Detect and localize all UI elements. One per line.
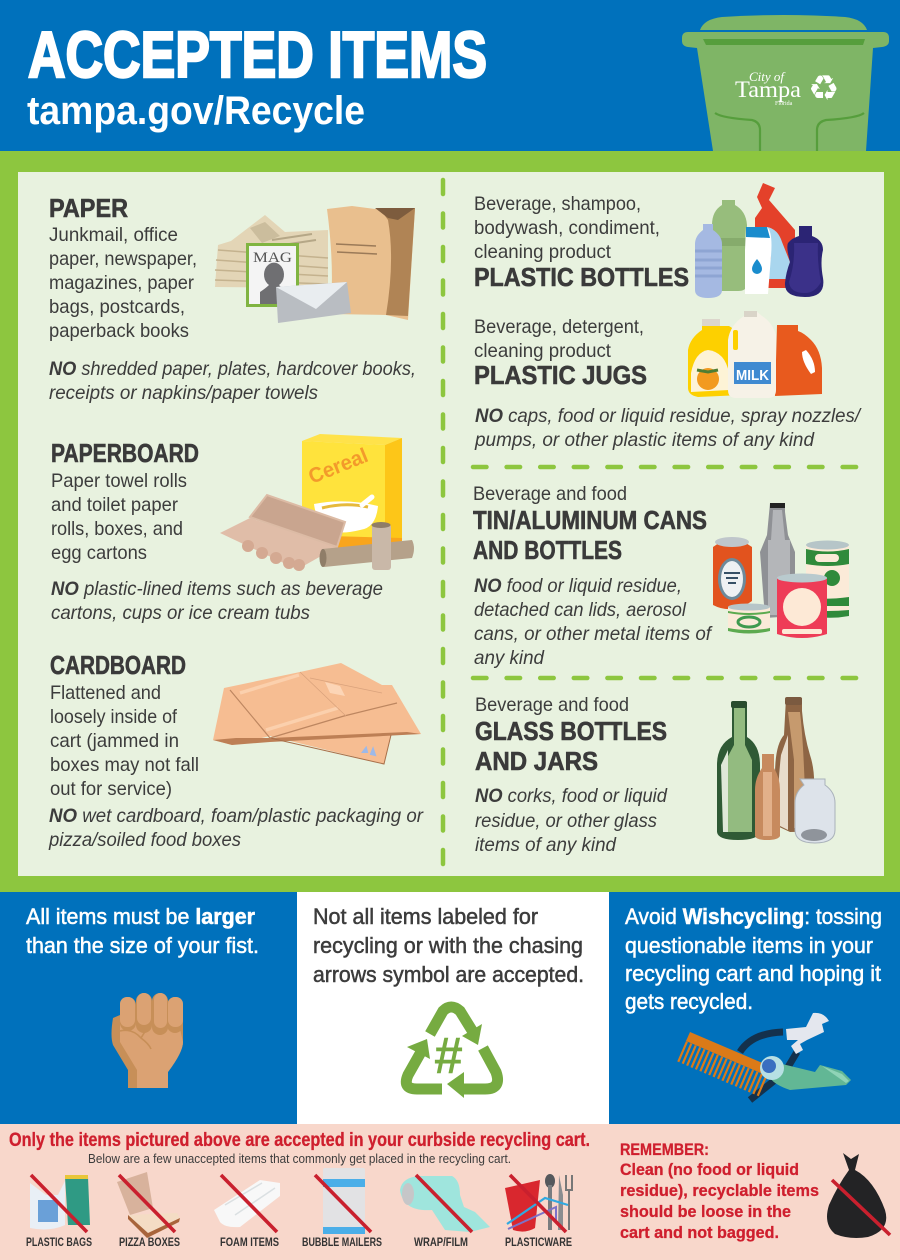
warning heading: Only the items pictured above are accepted in your curbside recycling cart. bbox=[9, 1130, 590, 1151]
icon: recycling cart: City of bbox=[749, 69, 786, 84]
item: plastic bags bbox=[26, 1175, 92, 1249]
icon: recycling cart: Florida bbox=[775, 101, 793, 107]
item: bubble mailers bbox=[302, 1168, 382, 1249]
cardboard section text: CARDBOARD bbox=[50, 650, 186, 680]
icon: recycling symbol with number sign bbox=[406, 1007, 498, 1098]
paperboard section text: cartons, cups or ice cream tubs bbox=[51, 602, 310, 624]
item: plasticware bbox=[505, 1174, 572, 1249]
cardboard section text: boxes may not fall bbox=[50, 754, 199, 776]
green frame bbox=[0, 151, 900, 892]
reminder text: cart and not bagged. bbox=[620, 1223, 779, 1242]
panel: wishcycling warning: questionable items in your bbox=[625, 933, 873, 958]
cardboard section text bbox=[48, 650, 424, 851]
tin and aluminum section text: any kind bbox=[474, 647, 545, 669]
glass bottles section text: NO corks, food or liquid bbox=[475, 785, 668, 807]
cardboard section text: NO wet cardboard, foam/plastic packaging or bbox=[49, 805, 424, 827]
cardboard section text: Flattened and bbox=[50, 682, 161, 704]
paperboard section text: PAPERBOARD bbox=[51, 438, 199, 468]
tin and aluminum section text: detached can lids, aerosol bbox=[474, 599, 687, 621]
item: wrap and film: WRAP/FILM bbox=[414, 1237, 468, 1249]
panel: wishcycling warning: Avoid Wishcycling: tossing bbox=[625, 904, 882, 929]
glass bottles section text: Beverage and food bbox=[475, 694, 629, 716]
panel: fist rule: than the size of your fist. bbox=[26, 933, 259, 958]
panel: chasing arrows rule bbox=[297, 892, 609, 1124]
cardboard section text: out for service) bbox=[50, 778, 172, 800]
item: foam items bbox=[214, 1175, 280, 1249]
icon: cans and metal bottle bbox=[713, 503, 849, 638]
icon: glass bottles and jar bbox=[717, 697, 835, 843]
header band bbox=[0, 0, 900, 151]
panel: not accepted items bbox=[0, 1124, 900, 1260]
cardboard section text: loosely inside of bbox=[50, 706, 178, 728]
icon: recycling cart: ♻ bbox=[808, 69, 839, 109]
paper section text bbox=[49, 193, 416, 404]
panel: accepted items bbox=[18, 172, 884, 876]
plastic bottles section text: cleaning product bbox=[474, 241, 612, 263]
panel: wishcycling warning bbox=[609, 892, 900, 1124]
icon: paperboard items bbox=[220, 434, 414, 571]
panel: chasing arrows rule: arrows symbol are accepted. bbox=[313, 962, 584, 987]
tin and aluminum section text: TIN/ALUMINUM CANS bbox=[473, 505, 707, 535]
icon: paper items bbox=[215, 206, 415, 323]
panel: wishcycling warning: gets recycled. bbox=[625, 989, 753, 1014]
plastic jugs section text: pumps, or other plastic items of any kind bbox=[474, 429, 815, 451]
item: wrap and film bbox=[400, 1175, 490, 1249]
icon: comb, pliers and tube bbox=[682, 1013, 851, 1100]
plastic jugs section text: cleaning product bbox=[474, 340, 612, 362]
glass bottles section text: items of any kind bbox=[475, 834, 617, 856]
title: ACCEPTED ITEMS bbox=[28, 18, 487, 91]
plastic bottles section text bbox=[474, 193, 689, 292]
icon: plastic jugs bbox=[688, 311, 822, 398]
glass bottles section text: residue, or other glass bbox=[475, 810, 657, 832]
item: pizza boxes: PIZZA BOXES bbox=[119, 1237, 180, 1249]
panel: wishcycling warning: recycling cart and hoping it bbox=[625, 961, 881, 986]
panel: fist rule bbox=[0, 892, 297, 1124]
paper section text: PAPER bbox=[49, 193, 128, 223]
paperboard section text: egg cartons bbox=[51, 542, 147, 564]
cardboard section text: cart (jammed in bbox=[50, 730, 179, 752]
icon: plastic bottles bbox=[695, 183, 823, 298]
website link: tampa.gov/Recycle bbox=[27, 89, 365, 133]
reminder text: residue), recyclable items bbox=[620, 1181, 819, 1200]
paper section text: paper, newspaper, bbox=[49, 248, 197, 270]
paperboard section text: Paper towel rolls bbox=[51, 470, 187, 492]
icon: black trash bag crossed out bbox=[827, 1153, 890, 1238]
glass bottles section text: GLASS BOTTLES bbox=[475, 716, 667, 746]
paperboard section text bbox=[51, 438, 383, 624]
icon: recycling cart bbox=[682, 15, 889, 151]
paperboard section text: and toilet paper bbox=[51, 494, 178, 516]
sub heading: Below are a few unaccepted items that commonly get placed in the recycling cart. bbox=[88, 1151, 511, 1166]
plastic jugs section text: NO caps, food or liquid residue, spray nozzles/ bbox=[475, 405, 862, 427]
paper section text: magazines, paper bbox=[49, 272, 194, 294]
glass bottles section text bbox=[475, 694, 668, 856]
item: plastic bags: PLASTIC BAGS bbox=[26, 1237, 92, 1249]
plastic jugs section text: Beverage, detergent, bbox=[474, 316, 644, 338]
icon: recycling symbol with number sign: # bbox=[434, 1027, 463, 1085]
paperboard section text: rolls, boxes, and bbox=[51, 518, 183, 540]
item: plasticware: PLASTICWARE bbox=[505, 1237, 572, 1249]
item: pizza boxes bbox=[117, 1172, 180, 1249]
icon: flattened cardboard bbox=[213, 663, 421, 764]
paper section text: bags, postcards, bbox=[49, 296, 185, 318]
item: bubble mailers: BUBBLE MAILERS bbox=[302, 1237, 382, 1249]
panel: fist rule: All items must be larger bbox=[26, 904, 255, 929]
paperboard section text: NO plastic-lined items such as beverage bbox=[51, 578, 383, 600]
paper section text: receipts or napkins/paper towels bbox=[49, 382, 318, 404]
icon: plastic jugs: MILK bbox=[736, 367, 769, 384]
paper section text: paperback books bbox=[49, 320, 189, 342]
glass bottles section text: AND JARS bbox=[475, 746, 598, 776]
reminder text: should be loose in the bbox=[620, 1202, 791, 1221]
icon: paper items: MAG bbox=[253, 250, 292, 266]
tin and aluminum section text bbox=[473, 483, 713, 669]
icon: paperboard items: Cereal bbox=[305, 444, 371, 489]
plastic jugs section text bbox=[474, 316, 862, 451]
icon: fist bbox=[112, 993, 183, 1088]
reminder text bbox=[620, 1140, 819, 1242]
paper section text: NO shredded paper, plates, hardcover books, bbox=[49, 358, 416, 380]
plastic bottles section text: bodywash, condiment, bbox=[474, 217, 660, 239]
cardboard section text: pizza/soiled food boxes bbox=[48, 829, 241, 851]
panel: chasing arrows rule: Not all items labeled for bbox=[313, 904, 538, 929]
plastic bottles section text: PLASTIC BOTTLES bbox=[474, 262, 689, 292]
tin and aluminum section text: NO food or liquid residue, bbox=[474, 575, 682, 597]
tin and aluminum section text: Beverage and food bbox=[473, 483, 627, 505]
tin and aluminum section text: AND BOTTLES bbox=[473, 535, 622, 565]
item: foam items: FOAM ITEMS bbox=[220, 1237, 279, 1249]
plastic jugs section text: PLASTIC JUGS bbox=[474, 360, 647, 390]
paper section text: Junkmail, office bbox=[49, 224, 178, 246]
plastic bottles section text: Beverage, shampoo, bbox=[474, 193, 641, 215]
icon: recycling cart: Tampa bbox=[735, 77, 801, 102]
reminder text: REMEMBER: bbox=[620, 1140, 709, 1159]
tin and aluminum section text: cans, or other metal items of bbox=[474, 623, 713, 645]
panel: chasing arrows rule: recycling or with the chasing bbox=[313, 933, 583, 958]
reminder text: Clean (no food or liquid bbox=[620, 1160, 799, 1179]
